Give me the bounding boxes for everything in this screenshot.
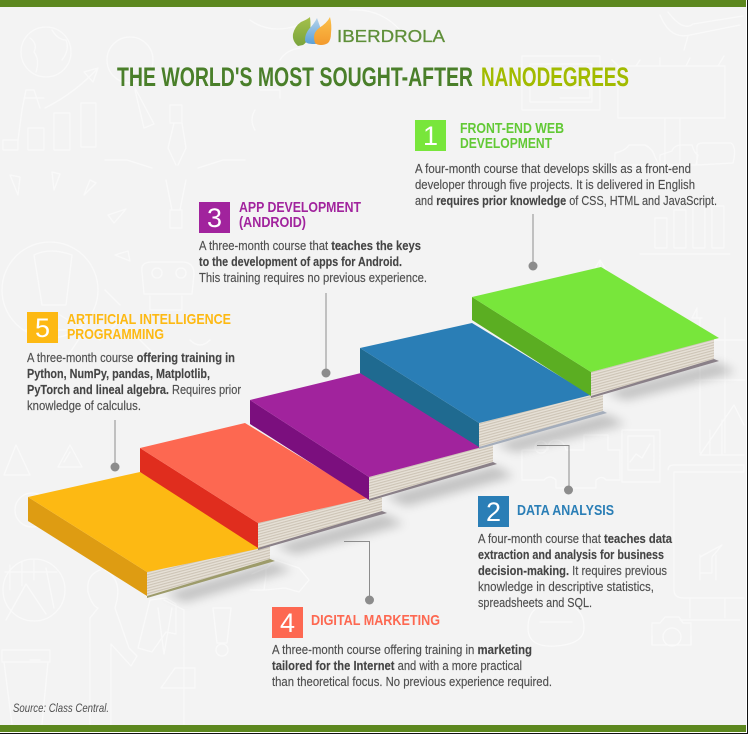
title: THE WORLD'S MOST SOUGHT-AFTER bbox=[117, 62, 473, 92]
panel 3: app development: 3 bbox=[207, 203, 222, 233]
panel 2: data analysis: decision-making. It requires previous bbox=[478, 563, 667, 578]
panel 2: data analysis: knowledge in descriptive statistics, bbox=[478, 579, 654, 594]
top bar bbox=[0, 0, 746, 7]
panel 5: artificial intelligence programming: PROGRAMMING bbox=[67, 326, 164, 343]
panel 5: artificial intelligence programming: Python, NumPy, pandas, Matplotlib, bbox=[27, 366, 210, 381]
panel 3: app development: A three-month course that teaches the keys bbox=[199, 238, 421, 253]
panel 1: front-end web development: 1 bbox=[423, 121, 438, 151]
panel 3: app development: This training requires no previous experience. bbox=[199, 270, 427, 285]
panel 4: digital marketing: A three-month course offering training in marketing bbox=[272, 642, 532, 657]
book shadows bbox=[165, 362, 736, 602]
panel 3: app development: APP DEVELOPMENT bbox=[239, 199, 361, 216]
logo: Iberdrola bbox=[293, 17, 445, 53]
panel 3: app development: (ANDROID) bbox=[239, 214, 306, 231]
panel 4: digital marketing: DIGITAL MARKETING bbox=[311, 612, 440, 629]
connector 4 bbox=[344, 542, 374, 604]
panel 4: digital marketing bbox=[272, 607, 552, 689]
connector 1 bbox=[528, 214, 538, 270]
panel 4: digital marketing: tailored for the Internet and with a more practical bbox=[272, 658, 522, 673]
book 4: red bbox=[140, 423, 387, 550]
panel 2: data analysis bbox=[478, 496, 673, 610]
bottom bar bbox=[0, 725, 746, 732]
panel 1: front-end web development: DEVELOPMENT bbox=[460, 135, 552, 152]
book 2: blue bbox=[360, 323, 607, 449]
panel 1: front-end web development bbox=[415, 120, 717, 208]
connector 2 bbox=[537, 446, 573, 494]
panel 1: front-end web development: and requires prior knowledge of CSS, HTML and JavaScript. bbox=[415, 193, 717, 208]
panel 1: front-end web development: A four-month course that develops skills as a front-end bbox=[415, 161, 691, 176]
title: NANODEGREES bbox=[481, 62, 629, 92]
source note: Source: Class Central. bbox=[13, 701, 109, 715]
book 5: yellow bbox=[28, 472, 275, 598]
panel 4: digital marketing: 4 bbox=[280, 608, 295, 638]
panel 2: data analysis: 2 bbox=[486, 497, 501, 527]
panel 5: artificial intelligence programming: ARTIFICIAL INTELLIGENCE bbox=[67, 311, 231, 328]
panel 2: data analysis: extraction and analysis for business bbox=[478, 547, 664, 562]
panel 3: app development: to the development of apps for Android. bbox=[199, 254, 402, 269]
panel 4: digital marketing: than theoretical focus. No previous experience required. bbox=[272, 674, 552, 689]
panel 5: artificial intelligence programming: knowledge of calculus. bbox=[27, 398, 141, 413]
connector 5 bbox=[110, 420, 120, 472]
panel 1: front-end web development: developer through five projects. It is delivered in English bbox=[415, 177, 695, 192]
panel 5: artificial intelligence programming: PyTorch and lineal algebra. Requires prior bbox=[27, 382, 242, 397]
panel 2: data analysis: spreadsheets and SQL. bbox=[478, 595, 592, 610]
book 1: green bbox=[472, 267, 719, 398]
panel 2: data analysis: A four-month course that teaches data bbox=[478, 531, 673, 546]
logo: Iberdrola: IBERDROLA bbox=[337, 26, 445, 46]
panel 5: artificial intelligence programming: A three-month course offering training in bbox=[27, 350, 235, 365]
panel 5: artificial intelligence programming: 5 bbox=[35, 313, 50, 343]
book 3: purple bbox=[250, 373, 497, 501]
panel 3: app development bbox=[199, 199, 427, 285]
panel 1: front-end web development: FRONT-END WEB bbox=[460, 120, 564, 137]
connector 3 bbox=[322, 293, 330, 378]
panel 2: data analysis: DATA ANALYSIS bbox=[517, 502, 614, 519]
panel 5: artificial intelligence programming bbox=[27, 311, 242, 413]
